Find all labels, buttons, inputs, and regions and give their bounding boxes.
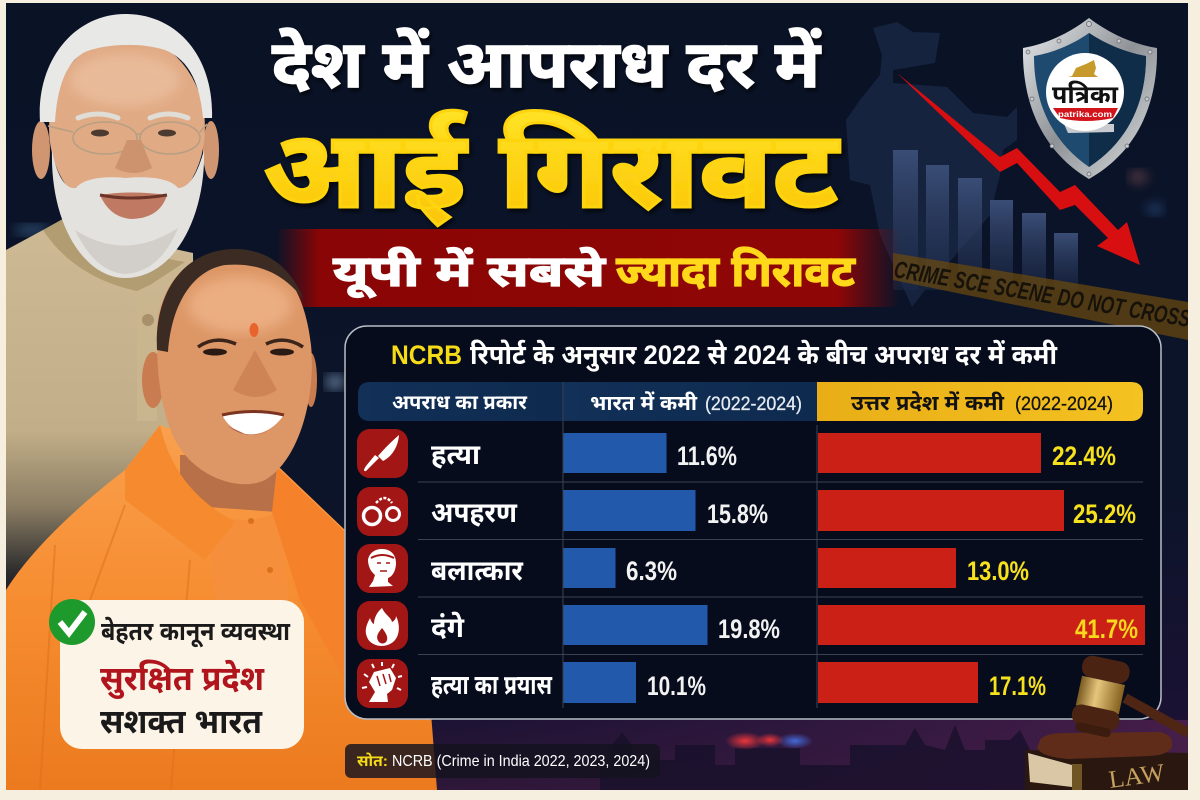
row: attempt to murder <box>357 659 1046 708</box>
icon: distressed face <box>357 544 408 593</box>
row: riots <box>357 601 1145 650</box>
icon: handcuffs <box>357 487 408 536</box>
row: attempt to murder: हत्या का प्रयास <box>431 670 553 700</box>
callout: better law and order: बेहतर कानून व्यवस्था <box>101 616 291 648</box>
icon: law book and gavel <box>1025 654 1188 794</box>
source note <box>345 744 660 778</box>
row: murder: 11.6% <box>677 441 737 471</box>
icon: law book and gavel: LAW <box>1107 759 1167 794</box>
callout: better law and order: सशक्त भारत <box>100 703 263 741</box>
source note: NCRB (Crime in India 2022, 2023, 2024) <box>392 753 650 770</box>
table header: (2022-2024) <box>1015 394 1113 415</box>
row: riots: दंगे <box>431 610 465 643</box>
panel heading: NCRB <box>391 340 462 370</box>
title line two: आई गिरावट <box>263 109 840 230</box>
row: rape: 6.3% <box>626 556 677 586</box>
red subtitle banner: ज्यादा गिरावट <box>616 247 856 296</box>
row: attempt to murder: 10.1% <box>647 671 706 701</box>
row: rape: बलात्कार <box>431 555 524 586</box>
panel heading: रिपोर्ट के अनुसार 2022 से 2024 के बीच अपराध दर में कमी <box>470 339 1058 371</box>
police light glow top right <box>1129 172 1163 213</box>
row: kidnapping: अपहरण <box>431 497 517 528</box>
row: attempt to murder: 17.1% <box>989 671 1046 701</box>
table header: अपराध का प्रकार <box>392 392 528 414</box>
portrait: man in beige kurta <box>6 14 219 600</box>
row: murder <box>357 429 1116 478</box>
patrika logo disc: patrika.com <box>1058 109 1112 119</box>
row: kidnapping: 15.8% <box>707 499 768 529</box>
patrika logo disc: पत्रिका <box>1052 80 1119 109</box>
main data panel <box>345 326 1161 719</box>
title line one: देश में आपराध दर में <box>272 27 821 101</box>
callout: better law and order <box>49 599 304 749</box>
source note: सोत: <box>357 753 388 770</box>
icon: raised fist <box>357 659 408 708</box>
red subtitle banner <box>276 229 900 307</box>
patrika logo disc <box>1046 53 1124 133</box>
icon: green check <box>49 599 95 645</box>
India map silhouette <box>846 22 1017 307</box>
row: kidnapping: 25.2% <box>1073 499 1136 529</box>
night skyline with police lights <box>600 725 1040 790</box>
row: murder: हत्या <box>431 439 481 470</box>
red subtitle banner: यूपी में सबसे <box>333 247 607 298</box>
glasses <box>48 122 207 154</box>
row: rape <box>357 544 1029 593</box>
row: rape: 13.0% <box>967 556 1029 586</box>
icon: flame <box>357 601 408 650</box>
row: kidnapping <box>357 487 1136 536</box>
patrika shield logo <box>1023 18 1157 179</box>
red decline arrow <box>897 73 1140 265</box>
callout: better law and order: सुरक्षित प्रदेश <box>100 659 265 700</box>
row: murder: 22.4% <box>1052 441 1116 471</box>
background bar chart <box>893 150 1078 290</box>
row: riots: 19.8% <box>718 614 780 644</box>
portrait: man in saffron robe <box>6 249 437 800</box>
row: riots: 41.7% <box>1075 614 1138 644</box>
table header: उत्तर प्रदेश में कमी <box>851 391 1005 415</box>
table header: (2022-2024) <box>705 394 802 415</box>
table header <box>358 382 1143 421</box>
icon: knife <box>357 429 408 478</box>
table header: भारत में कमी <box>590 391 698 415</box>
